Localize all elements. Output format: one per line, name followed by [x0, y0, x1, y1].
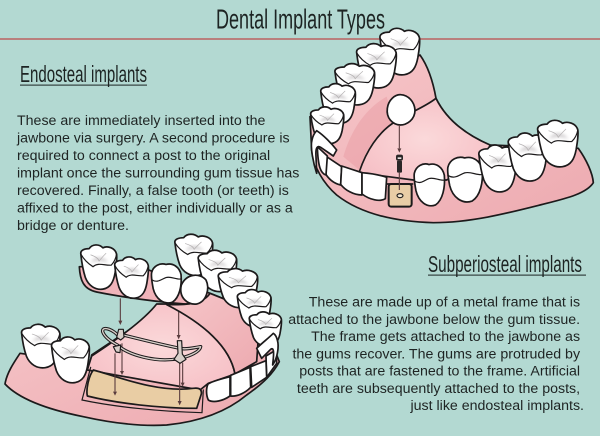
upper arrows: [118, 298, 181, 339]
teeth: right arm: [414, 164, 445, 206]
abutment post: [396, 155, 403, 173]
teeth: bridge: [81, 245, 117, 289]
detached bridge gum: [79, 267, 210, 305]
text block: subperiosteal description: attached to the jawbone below the gum tissue.: [288, 312, 580, 328]
text block: endosteal description: recovered. Finally, a false tooth (or teeth) is: [17, 183, 289, 199]
teeth: back arch: [175, 234, 213, 276]
heading: endosteal implants: [20, 61, 147, 87]
illustration: endosteal jaw: [310, 28, 593, 223]
gum base: [310, 55, 593, 223]
text block: subperiosteal description: just like endosteal implants.: [410, 398, 584, 414]
teeth: back left arm: [380, 28, 420, 75]
teeth: front incisors: [311, 131, 387, 200]
text block: subperiosteal description: posts that are fastened to the frame. Artificial: [299, 364, 580, 380]
gum arm shading: [343, 97, 393, 170]
text block: endosteal description: required to connect a post to the original: [17, 148, 270, 164]
false tooth: [387, 95, 415, 125]
metal frame: [103, 329, 201, 363]
teeth: front incisors: [207, 333, 278, 401]
text block: subperiosteal description: These are made up of a metal frame that is: [309, 294, 580, 310]
illustration: subperiosteal jaw: [5, 234, 282, 425]
text block: subperiosteal description: the gums recover. The gums are protruded by: [292, 346, 581, 362]
text block: endosteal description: affixed to the post, either individually or as a: [17, 200, 293, 216]
jawbone bar: [87, 370, 201, 408]
text block: endosteal description: implant once the surrounding gum tissue has: [17, 166, 299, 182]
gum arm shading: [193, 297, 257, 372]
right-side gum arm: [167, 293, 260, 374]
gum floor: [359, 98, 490, 180]
text block: endosteal description: bridge or denture.: [17, 218, 129, 234]
bone bar pocket: [82, 367, 203, 413]
post arrow: [397, 125, 401, 190]
gum floor: [87, 304, 235, 390]
text block: endosteal description: jawbone via surgery. A second procedure is: [16, 130, 290, 146]
text block: subperiosteal description: teeth are subsequently attached to the posts,: [297, 381, 580, 397]
implant screw in gap: [387, 184, 413, 207]
text block: subperiosteal description: The frame gets attached to the jawbone as: [311, 329, 580, 345]
heading: endosteal implants: Endosteal implants: [20, 61, 147, 87]
text block: endosteal description: These are immediately inserted into the: [17, 113, 266, 129]
teeth: left molars: [22, 324, 60, 368]
arrows into bar: [113, 343, 185, 405]
title: Dental Implant Types: [216, 4, 385, 34]
gum base: [5, 293, 279, 425]
title rule: [0, 38, 600, 40]
